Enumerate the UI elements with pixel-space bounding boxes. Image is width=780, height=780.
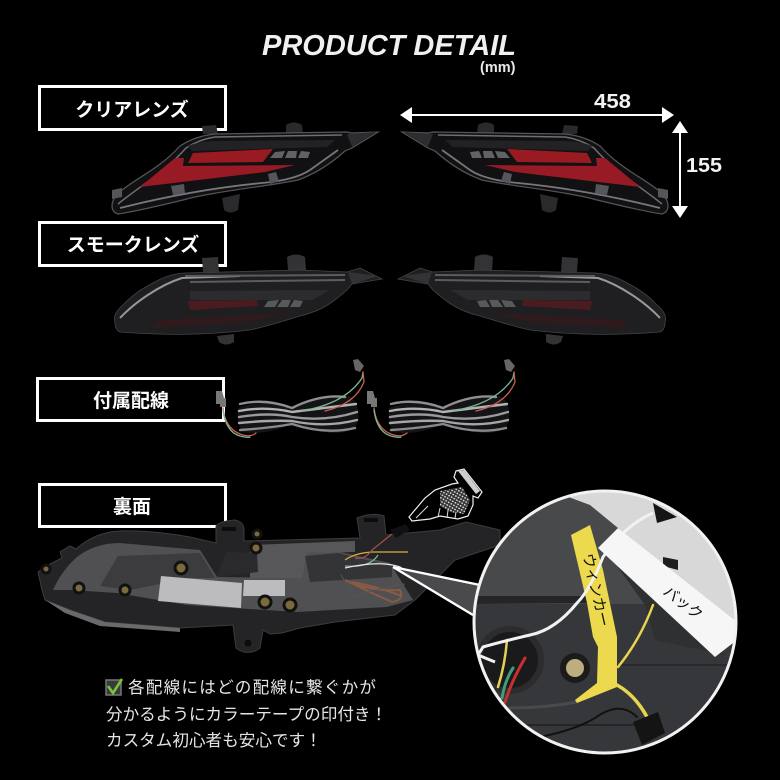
icon: pointing hand <box>409 469 482 521</box>
label box: smoke lens <box>40 222 226 266</box>
product photo: wiring harness 2 <box>367 359 515 437</box>
brown wire bundle <box>345 580 402 602</box>
title: PRODUCT DETAIL <box>262 30 516 62</box>
title <box>262 30 516 76</box>
dimension: width value: 458 <box>594 91 631 113</box>
label box: smoke lens: スモークレンズ <box>67 233 199 256</box>
dimension: height value: 155 <box>686 155 722 177</box>
icon: check mark <box>106 679 122 695</box>
label box: clear lens: クリアレンズ <box>75 98 189 121</box>
label box: included wiring <box>38 378 224 420</box>
grommet <box>479 629 541 691</box>
product photo: wiring harness 1 <box>216 359 364 437</box>
bolt <box>560 653 590 683</box>
note text with checkbox <box>106 678 387 750</box>
yellow tape <box>571 525 617 703</box>
product photo: back of lamp <box>38 514 500 652</box>
unit label: (mm) <box>480 60 516 76</box>
label box: back side <box>40 484 226 526</box>
tape label: turn signal: ウィンカー <box>579 552 612 629</box>
dimension arrow: height 155 <box>672 121 688 218</box>
label box: clear lens <box>40 86 226 130</box>
label box: included wiring: 付属配線 <box>93 390 169 412</box>
wires at connector <box>345 534 408 572</box>
product photo: clear lens right lamp <box>402 122 668 214</box>
note text with checkbox: カスタム初心者も安心です！ <box>106 731 322 750</box>
silver stickers <box>158 576 285 608</box>
note text with checkbox: 各配線にはどの配線に繋ぐかが <box>128 678 376 697</box>
product photo: smoke lens left lamp <box>114 254 382 344</box>
white wire <box>478 513 653 662</box>
note text with checkbox: 分かるようにカラーテープの印付き！ <box>106 705 387 724</box>
tape label: back: バック <box>660 583 706 624</box>
bolts <box>42 530 296 611</box>
label box: back side: 裏面 <box>113 496 151 518</box>
white tape <box>598 528 737 657</box>
product photo: clear lens left lamp <box>112 122 378 214</box>
product photo: smoke lens right lamp <box>398 254 666 344</box>
callout pointer <box>393 567 500 625</box>
magnified wiring detail circle <box>472 490 738 754</box>
dimension arrow: width 458 <box>400 107 674 123</box>
